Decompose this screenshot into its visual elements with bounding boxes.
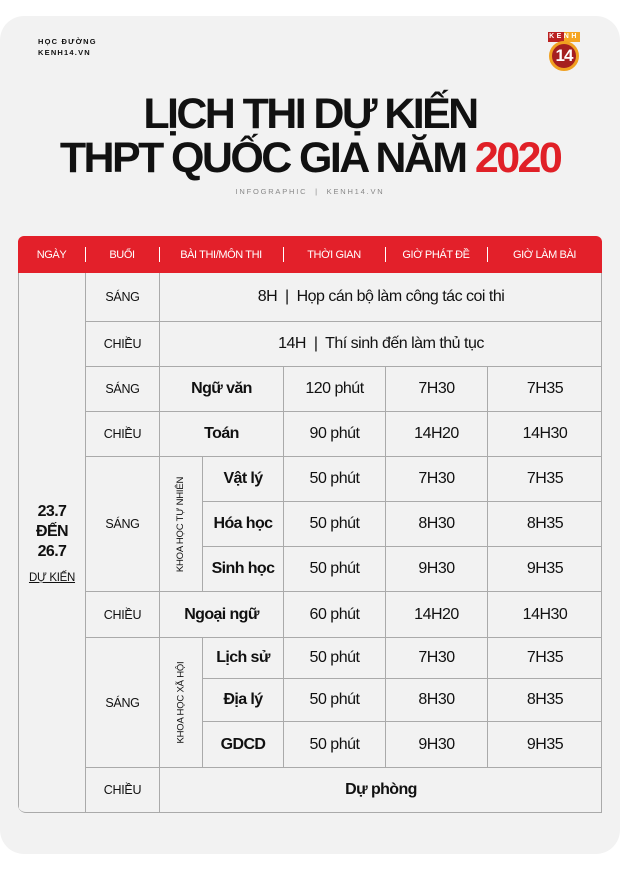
table body: 50 phút [310, 470, 359, 487]
brand text: KENH14.VN [38, 48, 91, 57]
table body: 8H30 [418, 515, 455, 532]
table body: 90 phút [310, 425, 359, 442]
date cell [18, 273, 85, 812]
table body: 7H30 [418, 470, 455, 487]
text: BÀI THI/MÔN THI [180, 248, 262, 260]
date cell: 23.7 [38, 502, 66, 520]
table body: 8H | Họp cán bộ làm công tác coi thi [258, 288, 504, 305]
table body: 50 phút [310, 649, 359, 666]
table body: 8H35 [527, 691, 563, 708]
table body: 50 phút [310, 736, 359, 752]
table body: SÁNG [105, 382, 140, 396]
table body: 7H30 [418, 380, 455, 397]
table body: 14H20 [414, 606, 459, 622]
table body: SÁNG [105, 290, 140, 304]
table body: KHOA HỌC XÃ HỘI [176, 662, 186, 744]
table body: Ngoại ngữ [184, 606, 259, 622]
table body: 50 phút [310, 560, 359, 577]
table body: Vật lý [223, 470, 263, 487]
table body: 50 phút [310, 691, 359, 708]
table body: 7H35 [527, 380, 563, 397]
table body: 9H35 [527, 560, 563, 577]
date cell: ĐẾN [36, 522, 68, 540]
table body: 14H20 [414, 425, 459, 442]
title: THPT QUỐC GIA NĂM 2020 [60, 134, 560, 182]
table body: CHIỀU [104, 608, 141, 622]
icon: kenh14 logo: KENH [549, 33, 579, 40]
table body: Địa lý [223, 691, 263, 708]
brand text [38, 37, 97, 57]
table body: 7H35 [527, 649, 563, 666]
text: GIỜ PHÁT ĐỀ [402, 248, 470, 260]
table body: 9H30 [418, 736, 455, 752]
table body: Hóa học [214, 515, 272, 532]
text: NGÀY [37, 248, 66, 260]
table body: GDCD [221, 736, 265, 752]
table body: CHIỀU [104, 337, 141, 351]
text: GIỜ LÀM BÀI [513, 248, 576, 260]
table body: 7H30 [418, 649, 455, 666]
text: BUỔI [109, 248, 135, 260]
table body: 14H30 [523, 425, 567, 442]
date cell: 26.7 [38, 542, 66, 560]
date cell: DỰ KIẾN [29, 572, 75, 584]
table body: Ngữ văn [191, 380, 252, 397]
table body: SÁNG [105, 696, 140, 710]
table body: 8H35 [527, 515, 563, 532]
title [60, 90, 561, 182]
table body: Toán [204, 425, 239, 442]
table body: SÁNG [105, 517, 140, 531]
table body [18, 273, 602, 813]
table body: 8H30 [418, 691, 455, 708]
table body: CHIỀU [104, 783, 141, 797]
icon: kenh14 logo [548, 32, 580, 71]
title: LỊCH THI DỰ KIẾN [143, 90, 477, 138]
text: THỜI GIAN [307, 248, 361, 260]
table body: 50 phút [310, 515, 359, 532]
brand text: HỌC ĐƯỜNG [38, 37, 97, 46]
table body: 60 phút [310, 606, 359, 622]
table body: 9H30 [418, 560, 455, 577]
table body: Lịch sử [216, 649, 270, 666]
table body: 14H | Thí sinh đến làm thủ tục [278, 335, 484, 352]
table body: KHOA HỌC TỰ NHIÊN [176, 476, 186, 572]
table body: 120 phút [305, 380, 364, 397]
subtitle: INFOGRAPHIC | KENH14.VN [235, 187, 385, 196]
table header [18, 236, 602, 273]
table body: Dự phòng [345, 781, 417, 798]
table body: 9H35 [527, 736, 563, 752]
icon: kenh14 logo: 14 [556, 46, 572, 65]
table body: 14H30 [523, 606, 567, 622]
table body: 7H35 [527, 470, 563, 487]
table body: Sinh học [212, 560, 274, 577]
table body: CHIỀU [104, 427, 141, 441]
